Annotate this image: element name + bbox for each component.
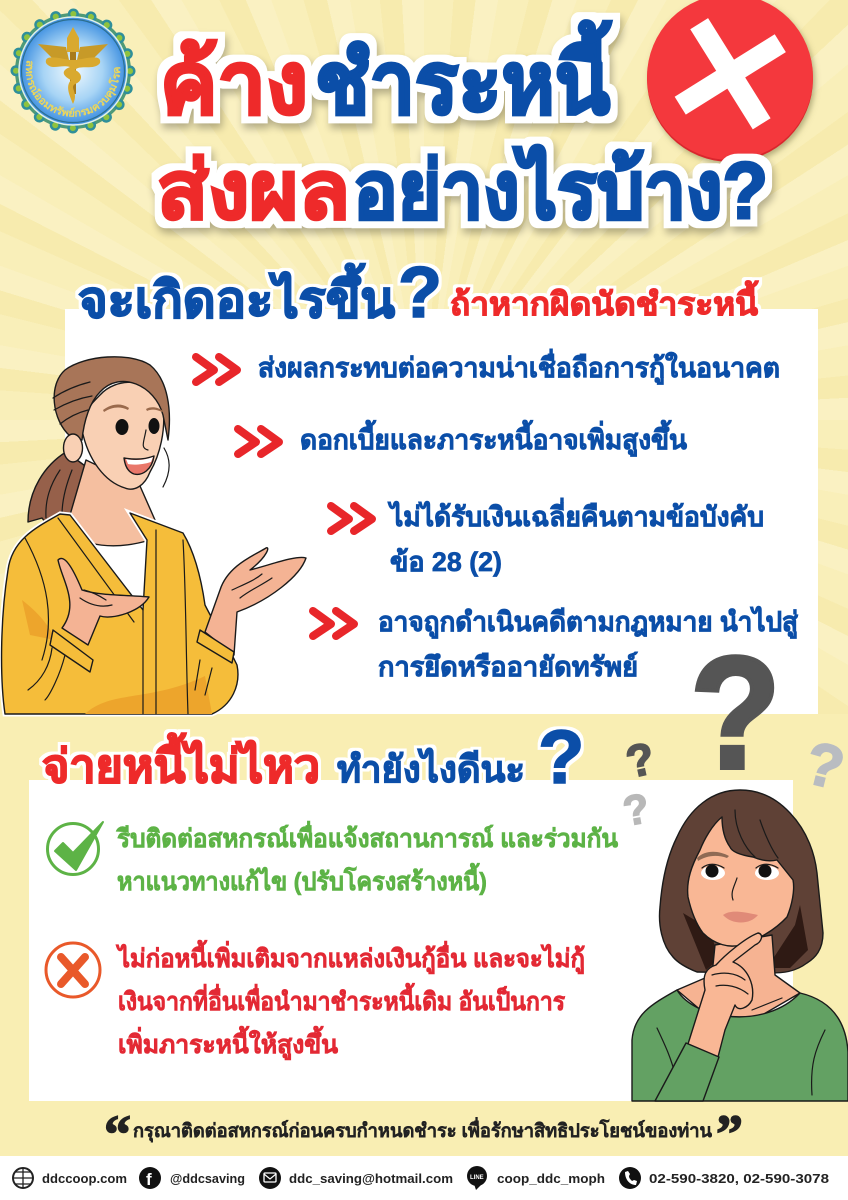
icon: double arrow 3 xyxy=(331,506,372,531)
text: contact cooperative: รีบติดต่อสหกรณ์เพื่อแจ้งสถานการณ์ และร่วมกัน xyxy=(115,821,618,853)
icon: red X badge xyxy=(647,0,813,162)
panel: what to do xyxy=(29,780,793,1101)
footer: website xyxy=(13,1168,127,1188)
title: line two: ส่งผล xyxy=(157,146,350,235)
footer: website: ddccoop.com xyxy=(42,1171,127,1186)
text: no dividend: ข้อ 28 (2) xyxy=(390,547,502,577)
illustration: woman presenting xyxy=(2,357,306,714)
illustration: big dark question mark: ? xyxy=(690,623,781,802)
illustration: thinking woman xyxy=(632,790,848,1101)
footer: facebook: f xyxy=(146,1170,152,1189)
icon: double arrow 1 xyxy=(196,357,237,382)
footer: email: ddc_saving@hotmail.com xyxy=(289,1171,453,1186)
title: line two: อย่างไรบ้าง? xyxy=(353,144,768,235)
panel: consequences background xyxy=(65,309,818,714)
text: no more debt xyxy=(115,939,585,1061)
footer: line: coop_ddc_moph xyxy=(497,1171,605,1186)
text: contact cooperative: หาแนวทางแก้ไข (ปรับโครงสร้างหนี้) xyxy=(117,862,487,896)
text: no dividend: ไม่ได้รับเงินเฉลี่ยคืนตามข้อบังคับ xyxy=(387,497,764,532)
quote reminder xyxy=(104,1104,743,1164)
text: no more debt: ไม่ก่อหนี้เพิ่มเติมจากแหล่งเงินกู้อื่น และจะไม่กู้ xyxy=(115,939,585,975)
panel: footer contact strip xyxy=(0,1156,848,1200)
heading: can't pay: ทำยังไงดีนะ xyxy=(337,747,525,790)
quote reminder: “ xyxy=(104,1104,131,1164)
footer: facebook: @ddcsaving xyxy=(170,1171,245,1186)
footer: phone xyxy=(619,1167,829,1189)
illustration: small dark question mark: ? xyxy=(621,732,659,788)
title: line one xyxy=(160,20,612,132)
text: no more debt: เงินจากที่อื่นเพื่อนำมาชำระหนี้เดิม อันเป็นการ xyxy=(118,982,566,1016)
footer: email xyxy=(259,1167,453,1189)
quote reminder: กรุณาติดต่อสหกรณ์ก่อนครบกำหนดชำระ เพื่อรักษาสิทธิประโยชน์ของท่าน xyxy=(133,1117,712,1143)
icon: double arrow 2 xyxy=(238,429,279,454)
text: no dividend xyxy=(387,497,764,577)
title: line two xyxy=(157,144,768,235)
icon: double arrow 4 xyxy=(313,611,354,636)
title: line one: ค้าง xyxy=(160,36,308,132)
heading: what happens if overdue: ถ้าหากผิดนัดชำระหนี้ xyxy=(450,280,759,322)
text: credit impact: ส่งผลกระทบต่อความน่าเชื่อถือการกู้ในอนาคต xyxy=(258,348,780,385)
panel: lower background band xyxy=(0,714,848,1156)
quote reminder: ” xyxy=(716,1104,743,1164)
text: contact cooperative xyxy=(115,821,618,896)
text: no more debt: เพิ่มภาระหนี้ให้สูงขึ้น xyxy=(118,1025,338,1061)
footer: facebook xyxy=(139,1167,245,1189)
text: legal action: การยึดหรืออายัดทรัพย์ xyxy=(378,651,638,682)
heading: what happens if overdue: ? xyxy=(398,253,442,333)
icon: green check xyxy=(48,822,103,874)
heading: what happens if overdue xyxy=(78,253,759,333)
icon: orange cross xyxy=(46,943,100,997)
heading: can't pay: จ่ายหนี้ไม่ไหว xyxy=(42,732,320,792)
footer: phone: 02-590-3820, 02-590-3078 xyxy=(649,1171,829,1186)
text: legal action: อาจถูกดำเนินคดีตามกฎหมาย นำไปสู่ xyxy=(378,606,798,639)
illustration: small grey question mark: ? xyxy=(619,784,653,835)
footer: line xyxy=(467,1166,605,1190)
heading: can't pay: ? xyxy=(538,715,584,800)
text: legal action xyxy=(378,606,798,682)
text: interest rises: ดอกเบี้ยและภาระหนี้อาจเพิ่มสูงขึ้น xyxy=(300,419,688,457)
footer: line: LINE xyxy=(470,1175,484,1181)
title: line one: ชำระหนี้ xyxy=(315,20,612,132)
heading: can't pay xyxy=(42,715,584,800)
heading: what happens if overdue: จะเกิดอะไรขึ้น xyxy=(78,263,395,328)
